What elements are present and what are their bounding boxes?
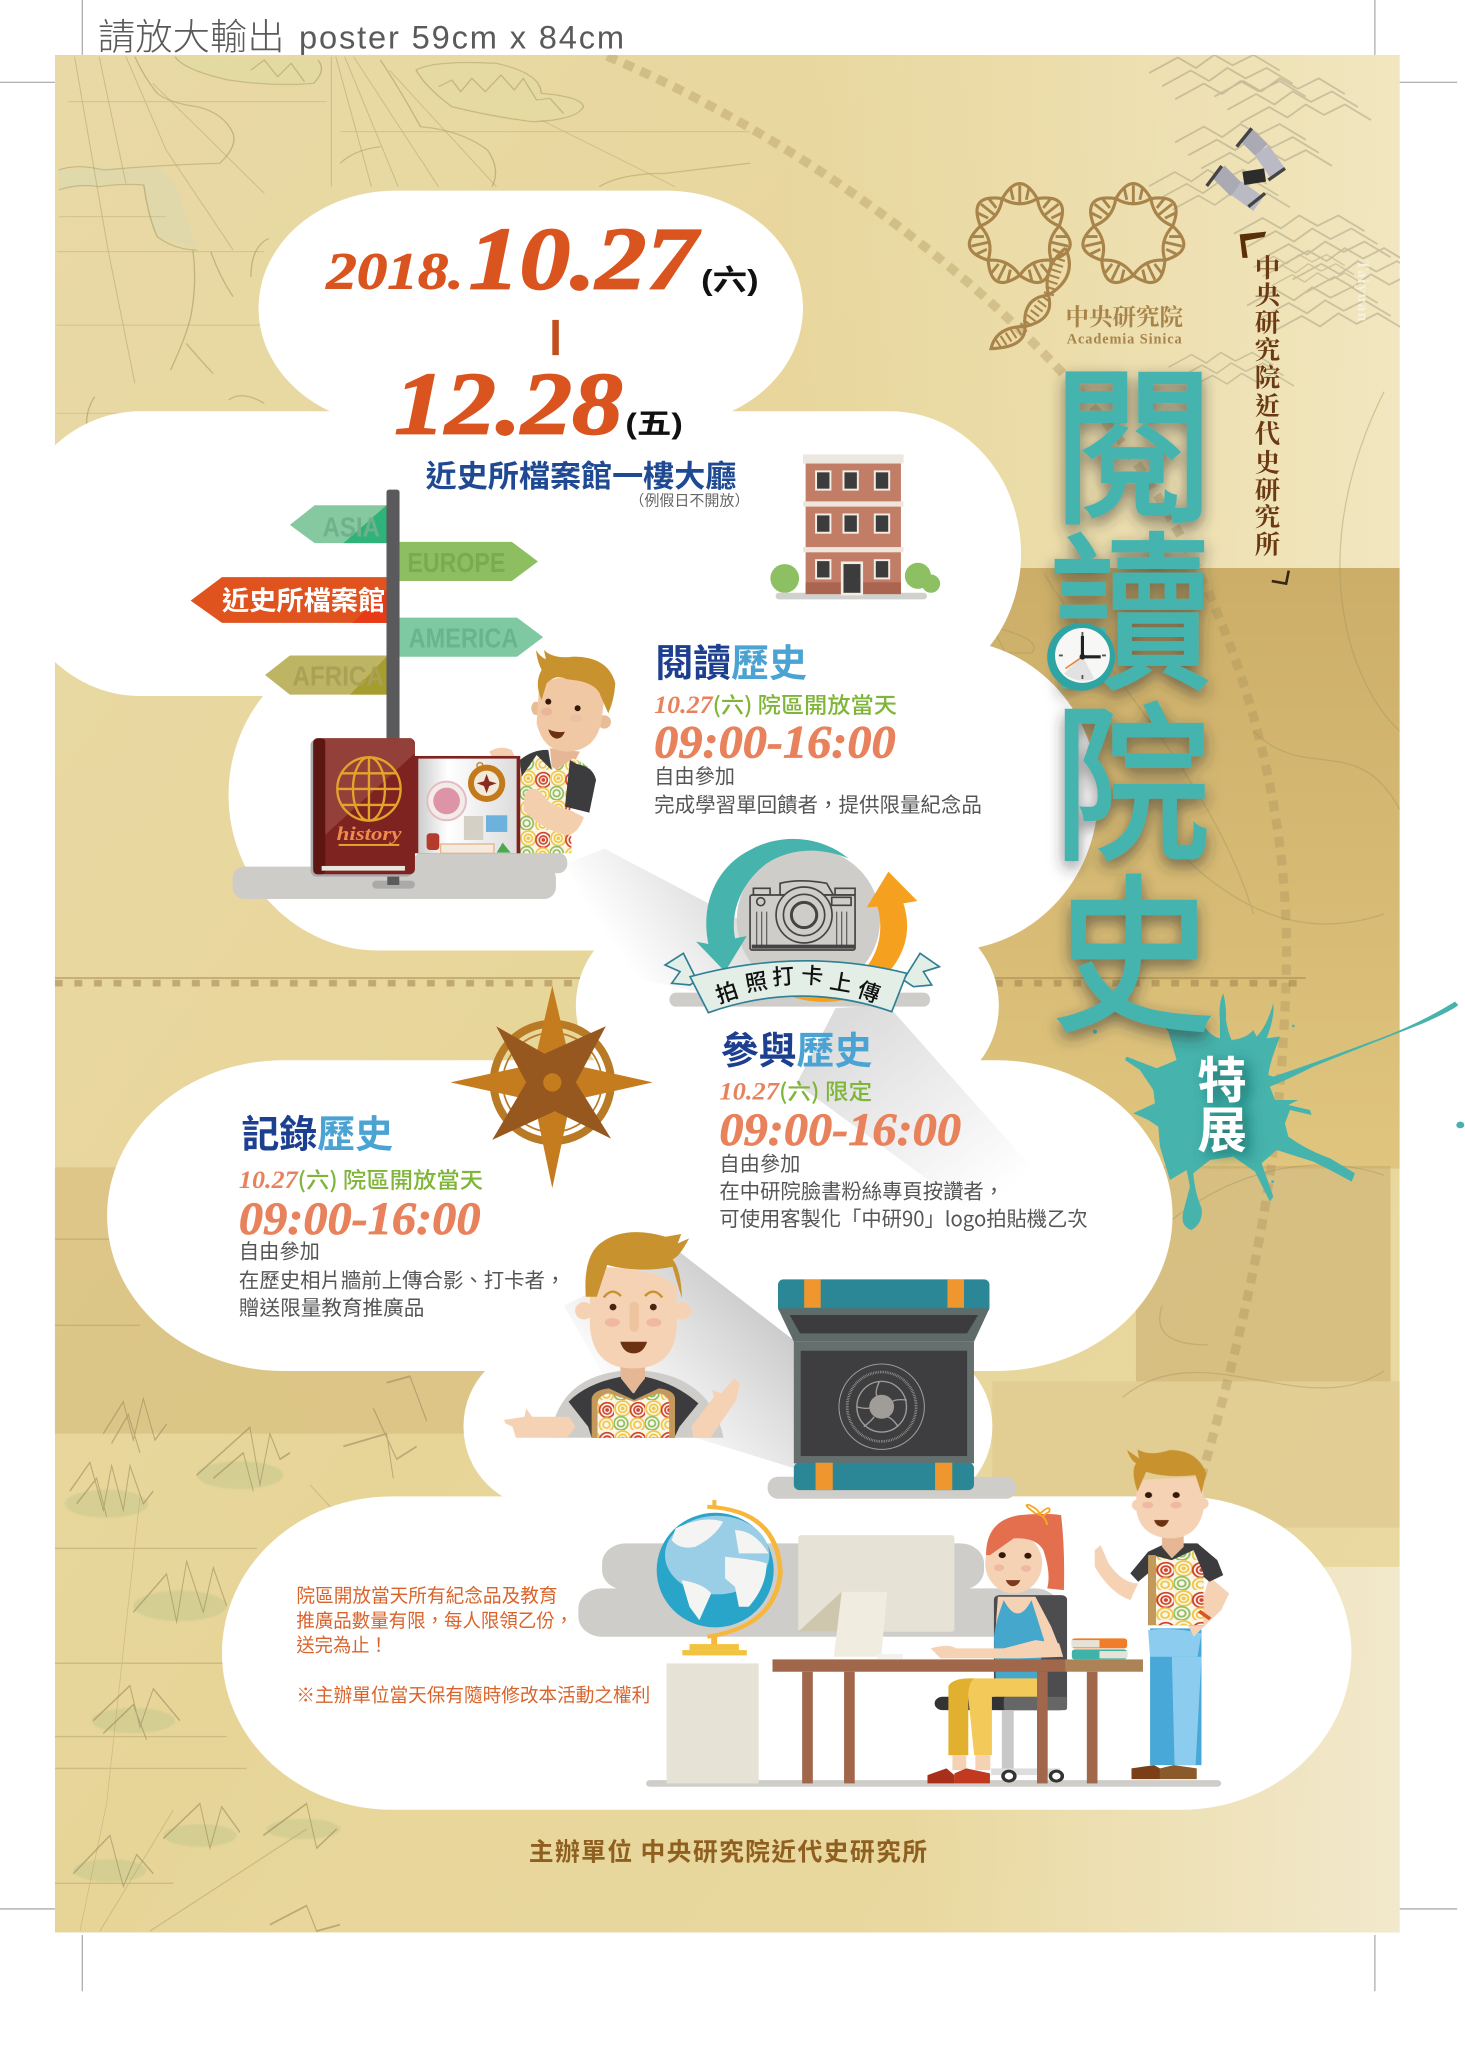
notice text: 推廣品數量有限，每人限領乙份，: [296, 1606, 573, 1633]
location: 近史所檔案館一樓大廳: [426, 451, 736, 496]
map: lower left mountains: [55, 1239, 427, 1931]
ground: [233, 853, 567, 899]
splash label: 特: [1197, 1041, 1247, 1113]
sign: Europe: [400, 542, 538, 581]
date heading: 2018.: [325, 243, 464, 301]
map: contour hatching upper right: [1148, 55, 1400, 386]
history book: history: [337, 824, 402, 845]
section: recording history: [239, 1104, 565, 1321]
organizer footer: 主辦單位 中央研究院近代史研究所: [529, 1833, 927, 1869]
notice text: 送完為止！: [296, 1631, 388, 1658]
date heading: (五): [625, 408, 683, 440]
pole: [386, 490, 400, 888]
splash label: [1197, 1041, 1247, 1163]
arrow: orange: [787, 872, 917, 1002]
books: [1072, 1638, 1127, 1659]
section: recording history: 自由參加: [239, 1236, 320, 1265]
open book page: [414, 756, 520, 853]
section: reading history: 完成學習單回饋者，提供限量紀念品: [654, 789, 982, 818]
print instruction header: poster 59cm x 84cm: [299, 18, 624, 55]
pedestal: [667, 1663, 759, 1783]
illustration: man with history book: [233, 650, 615, 899]
long drop shadows: [564, 849, 1045, 1469]
icon: building: [770, 454, 940, 599]
splash label: 展: [1197, 1091, 1247, 1163]
date heading: 10.27: [469, 211, 701, 309]
main title: 院: [1054, 649, 1210, 895]
section: participating in history: 可使用客製化「中研90」logo拍貼機乙次: [719, 1203, 1088, 1232]
sign: Asia: [290, 505, 386, 543]
section: recording history: 09:00-16:00: [239, 1193, 480, 1245]
map label: Taiyuan: Taiyuan: [1354, 260, 1371, 321]
section: participating in history: 參與歷史: [721, 1020, 872, 1075]
section: participating in history: 在中研院臉書粉絲專頁按讚者，: [719, 1176, 1004, 1205]
icon: camera check-in badge: 拍照打卡上傳: [711, 958, 885, 1010]
chair: [994, 1595, 1067, 1710]
main title: 史: [1053, 820, 1214, 1066]
section: participating in history: [719, 1020, 1088, 1232]
vertical institute name: [1240, 232, 1289, 584]
aperture emblem: [839, 1364, 924, 1449]
globe emblem: [337, 757, 401, 821]
section: reading history: 10.27(六) 院區開放當天: [654, 688, 897, 720]
camera drawing: [750, 881, 855, 950]
section: reading history: [654, 632, 982, 818]
sign: Africa: [265, 655, 386, 695]
history book: [311, 738, 415, 877]
section: recording history: 在歷史相片牆前上傳合影、打卡者，: [239, 1264, 565, 1293]
section: reading history: 自由參加: [654, 760, 735, 789]
sign: archives: 近史所檔案館: [222, 579, 385, 618]
backdrop: [578, 1543, 1059, 1637]
ribbon banner: [665, 953, 939, 1013]
main title: 讀: [1050, 478, 1211, 724]
ink splash: [1093, 993, 1464, 1230]
desk: [773, 1659, 1143, 1783]
map: railway lines: [607, 56, 1287, 1567]
section: recording history: 10.27(六) 院區開放當天: [239, 1163, 483, 1195]
print instruction header: [98, 8, 624, 61]
sign: archives: [191, 577, 386, 623]
print instruction header: 請放大輸出: [98, 8, 285, 61]
date heading: (六): [701, 265, 759, 297]
notice text: ※主辦單位當天保有隨時修改本活動之權利: [296, 1680, 650, 1707]
notice text: [296, 1581, 650, 1707]
section: reading history: 09:00-16:00: [654, 716, 896, 768]
main title: 閱: [1054, 313, 1213, 559]
date heading: 12.28: [394, 355, 623, 453]
monitor and stand: [798, 1535, 954, 1632]
sign: Africa: AFRICA: [292, 660, 384, 691]
woman: [927, 1505, 1064, 1783]
logo: Academia Sinica 90: Academia Sinica: [1067, 331, 1182, 347]
logo: Academia Sinica 90: 中央研究院: [1065, 298, 1183, 332]
sign: America: AMERICA: [409, 623, 519, 654]
notice text: 院區開放當天所有紀念品及教育: [296, 1581, 558, 1608]
illustration: suitcase: [768, 1279, 1016, 1499]
illustration: man bust: [504, 1232, 740, 1438]
section: participating in history: 自由參加: [719, 1148, 800, 1177]
section: participating in history: 09:00-16:00: [719, 1104, 961, 1156]
icon: binoculars: [1207, 128, 1285, 207]
map: upper left coast: [57, 57, 750, 443]
section: reading history: 閱讀歷史: [655, 632, 807, 687]
arrow: teal: [696, 839, 848, 972]
signpost: [191, 490, 543, 888]
sign: Asia: ASIA: [323, 512, 380, 543]
vertical institute name: 中央研究院近代史研究所: [1255, 249, 1282, 562]
icon: clock: [1047, 623, 1115, 691]
section: recording history: 記錄歷史: [242, 1104, 393, 1159]
section: recording history: 贈送限量教育推廣品: [239, 1292, 424, 1321]
sign: Europe: EUROPE: [407, 547, 505, 578]
date heading: [325, 211, 759, 453]
man: [489, 650, 615, 853]
white clouds: [9, 191, 1351, 1810]
standing man: [1095, 1449, 1229, 1779]
globe: [657, 1500, 780, 1655]
icon: camera check-in badge: [665, 839, 939, 1013]
icon: compass rose: [450, 986, 653, 1188]
main title: [1050, 313, 1214, 1066]
logo: Academia Sinica 90: [966, 184, 1187, 349]
location: （例假日不開放）: [629, 489, 749, 510]
section: participating in history: 10.27(六) 限定: [719, 1074, 872, 1106]
illustration: office scene with globe: [578, 1449, 1229, 1787]
